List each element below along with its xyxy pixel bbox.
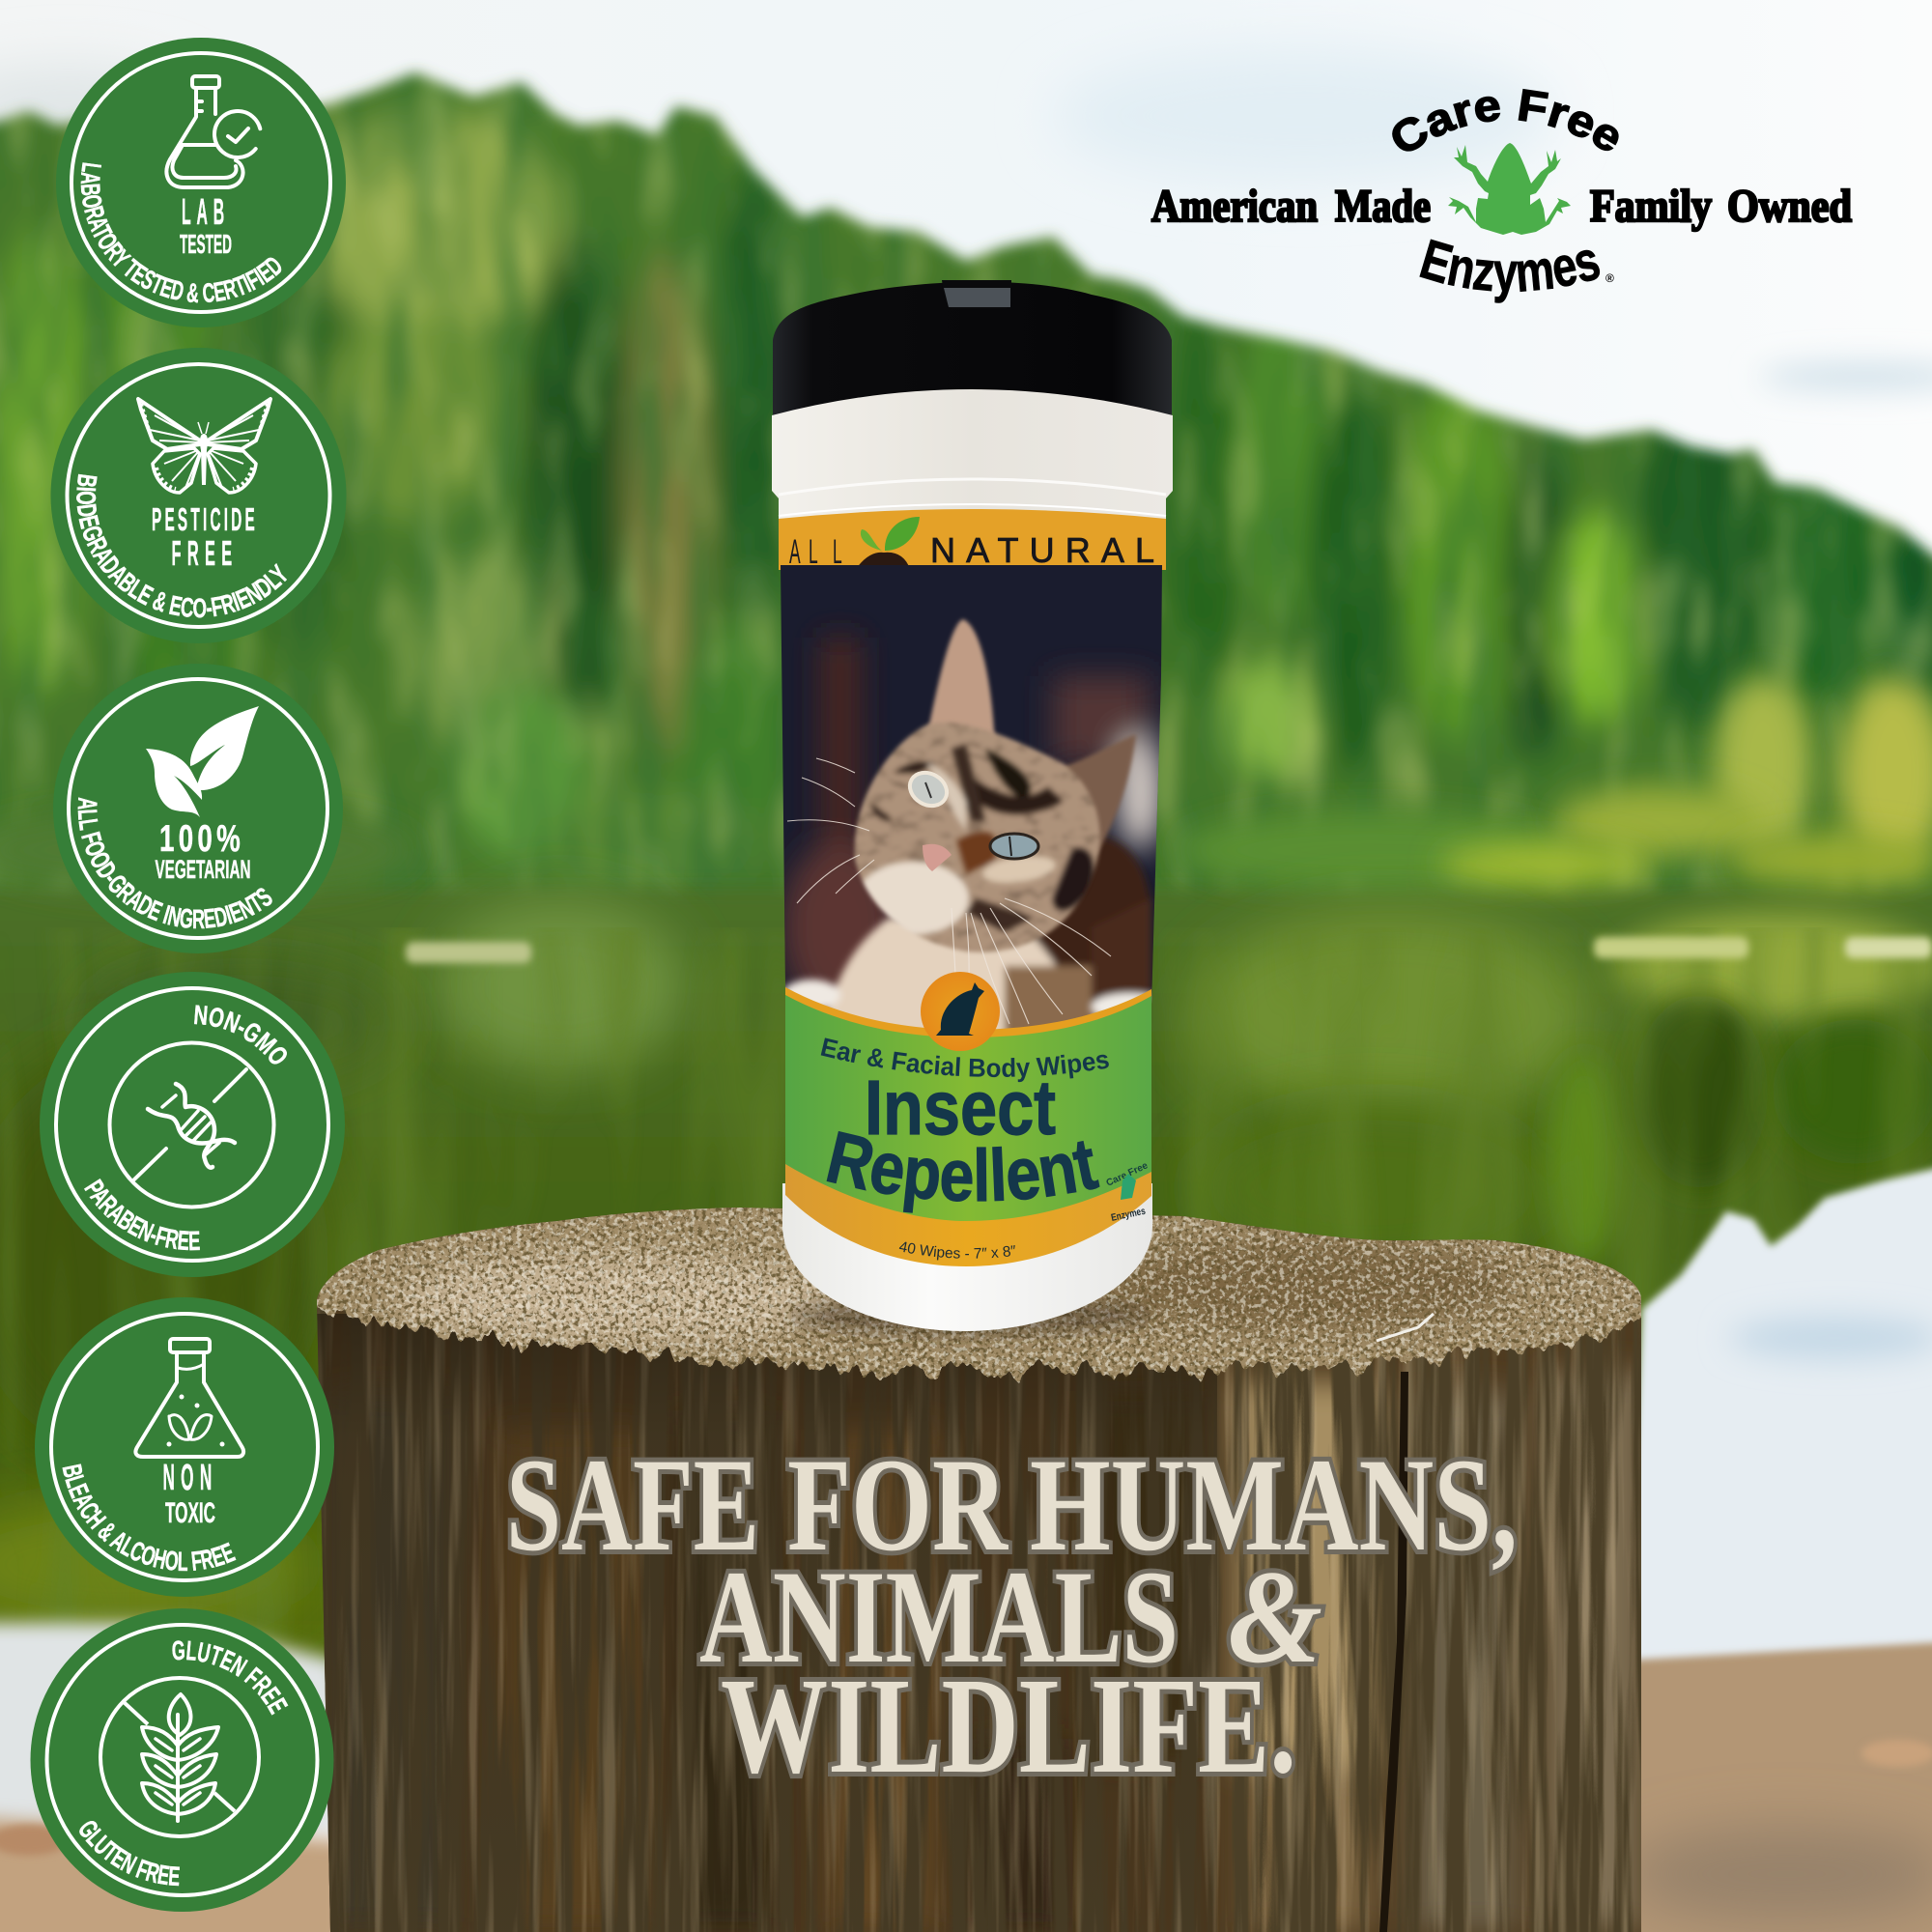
label: All Natural band: NATURAL: [930, 530, 1154, 570]
registered mark: ®: [1605, 271, 1614, 285]
badge: pesticide free: PESTICIDE: [152, 501, 258, 537]
stump cut surface: [317, 1208, 1641, 1383]
badge: vegetarian: [37, 664, 343, 974]
logo: Family Owned: [1590, 181, 1852, 232]
sky reflection in lake: [1623, 1167, 1932, 1700]
logo: American Made: American: [1151, 181, 1318, 232]
slogan line 1: SAFE: [506, 1431, 759, 1578]
GLUTEN FREE bottom: GLUTEN FREE: [65, 1808, 192, 1905]
badge: pesticide free: [32, 348, 347, 665]
label: cat photo: [781, 565, 1169, 1043]
forest treeline: [0, 63, 1932, 904]
stump crack: [1379, 1372, 1408, 1932]
GLUTEN FREE top: GLUTEN FREE: [158, 1617, 303, 1726]
NON-GMO: NON-GMO: [182, 988, 300, 1077]
badge: lab tested: [37, 38, 346, 350]
icon: lab flask with check: [166, 76, 270, 187]
label: product name: Ear & Facial Body Wipes: [821, 1037, 1109, 1082]
curved text: ALL FOOD-GRADE INGREDIENTS: [37, 785, 284, 974]
slogan line 2: ANIMALS: [699, 1543, 1179, 1690]
shore ground: [0, 1642, 1932, 1932]
curved text: BIODEGRADABLE & ECO-FRIENDLY: [32, 464, 298, 665]
cat eye right: [990, 834, 1038, 859]
label: green panel: [785, 992, 1151, 1232]
strike line: [124, 1702, 235, 1811]
slogan line 1: [506, 1431, 1518, 1578]
label: product name: Insect: [865, 1065, 1056, 1151]
curved text: BLEACH & ALCOHOL FREE: [33, 1451, 247, 1610]
cat body: [785, 835, 1154, 1030]
strike line: [134, 1069, 246, 1179]
slogan line 2: &: [1228, 1543, 1322, 1690]
badge: non toxic: NON: [162, 1458, 218, 1498]
logo: Enzymes arc: Enzymes: [1419, 240, 1600, 303]
icon: DNA: [148, 1084, 235, 1168]
bottle shadow on stump: [787, 1296, 1154, 1335]
brand logo: [1151, 79, 1852, 304]
badge: gluten free: [31, 1608, 334, 1912]
VEGETARIAN: VEGETARIAN: [155, 855, 251, 884]
logo: Family Owned: Family: [1590, 181, 1712, 232]
100%: 100%: [159, 818, 244, 860]
cat head and ears: [840, 619, 1136, 966]
badge: pesticide free: FREE: [172, 533, 238, 573]
label: product name: Repellent: [827, 1130, 1099, 1213]
label: orange lower band: [785, 1164, 1151, 1266]
icon: flask with leaves: [135, 1339, 243, 1457]
cat whiskers: [787, 758, 1111, 1024]
icon: butterfly: [138, 399, 270, 493]
logo: American Made: Made: [1335, 181, 1431, 232]
cat eye left: [904, 766, 952, 812]
cat silhouette badge: [921, 972, 1000, 1051]
slogan line 3: WILDLIFE.: [721, 1649, 1296, 1802]
label: product name: [818, 1033, 1112, 1217]
label: small logo: Enzymes: [1110, 1206, 1147, 1224]
badge: lab tested: LAB: [182, 192, 230, 233]
icon: frog: [1448, 143, 1571, 235]
label: small logo: Care Free: [1105, 1160, 1150, 1189]
logo: Care Free arc: Care Free: [1392, 89, 1619, 152]
lake water with reflection: [0, 889, 1932, 1690]
tree stump: [290, 1179, 1671, 1932]
TOXIC: TOXIC: [165, 1497, 215, 1529]
product bottle: [772, 280, 1173, 1331]
bottle collar: [772, 389, 1173, 522]
bottle lid: [773, 280, 1172, 430]
badge: lab tested: TESTED: [180, 229, 232, 259]
logo: Family Owned: Owned: [1727, 181, 1852, 232]
cat nose: [923, 844, 952, 871]
sky: [0, 0, 1932, 676]
wipes count: 40 Wipes - 7″ x 8″: [898, 1242, 1015, 1260]
badge: non toxic: [33, 1297, 334, 1610]
label: All Natural band: [779, 509, 1166, 571]
label: All Natural band: ALL: [789, 532, 842, 571]
slogan line 1: HUMANS,: [1030, 1431, 1518, 1578]
slogan: [506, 1431, 1518, 1802]
PARABEN-FREE: PARABEN-FREE: [70, 1168, 213, 1273]
bottle base: [782, 1183, 1152, 1331]
label: small logo: [1105, 1160, 1150, 1224]
icon: leaves: [146, 706, 259, 817]
icon: wheat: [142, 1694, 218, 1821]
slogan line 1: FOR: [787, 1431, 1009, 1578]
icon: seedling on soil: [856, 517, 920, 569]
curved text: LABORATORY TESTED & CERTIFIED: [37, 152, 294, 350]
badge: non-GMO paraben-free: [40, 972, 345, 1277]
